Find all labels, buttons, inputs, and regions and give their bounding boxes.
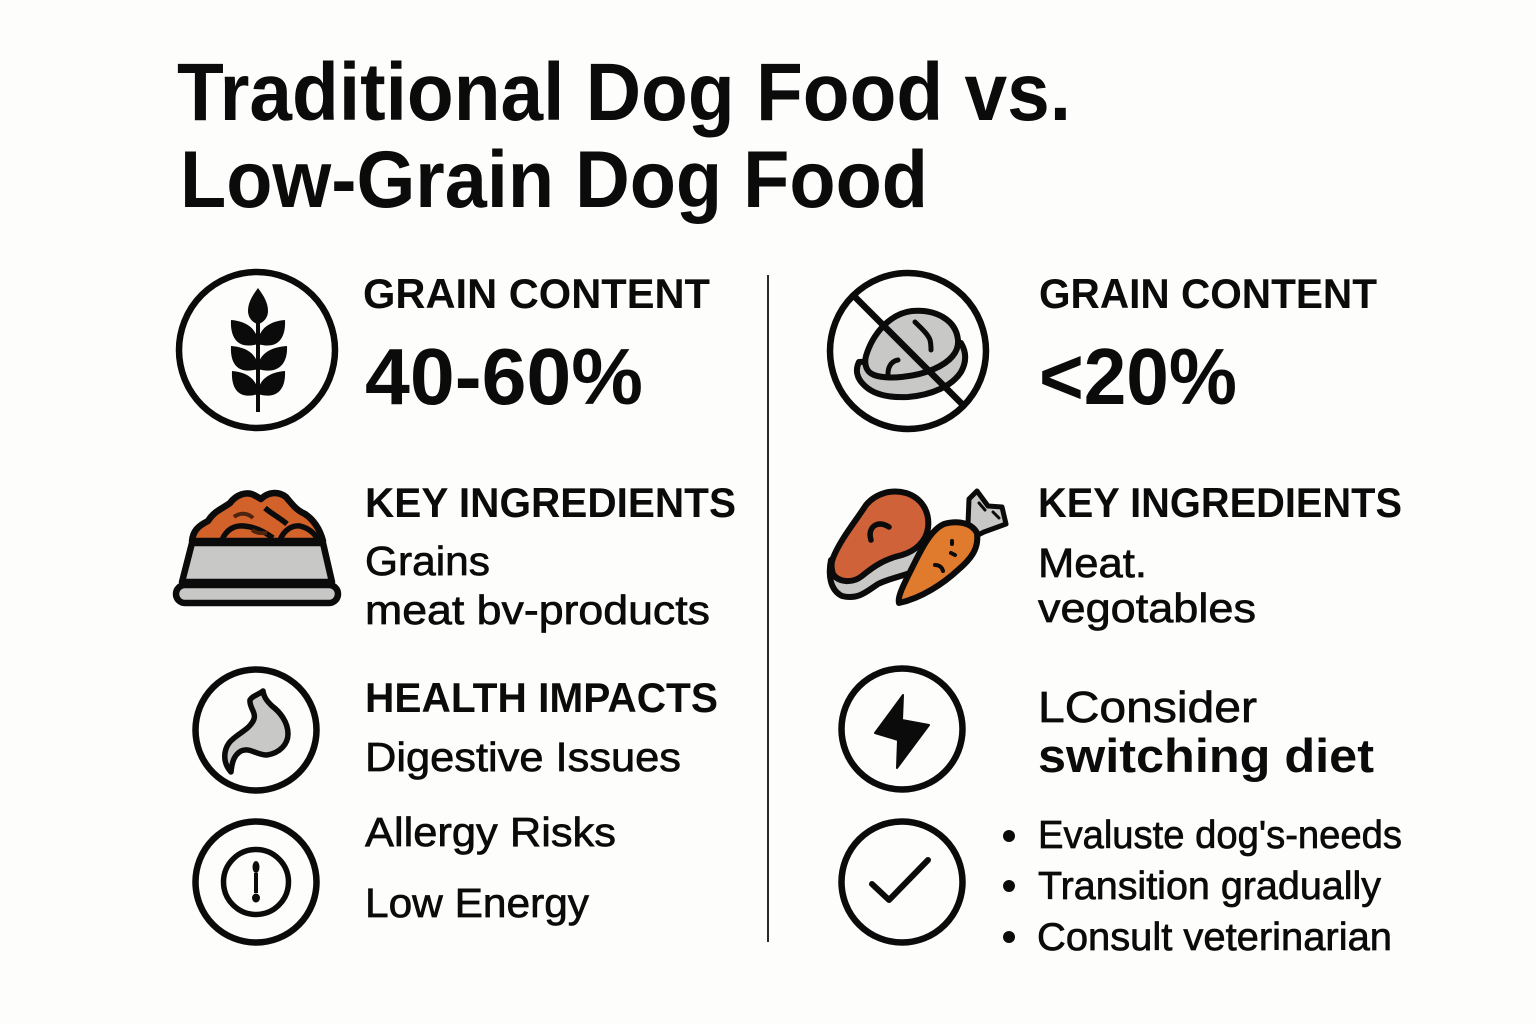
- right checklist: Consult veterinarian: [1037, 916, 1392, 959]
- icon: meat and carrot: [830, 491, 1006, 603]
- right consider switching: [1038, 683, 1374, 782]
- right checklist: [1003, 814, 1402, 959]
- left key ingredients: KEY INGREDIENTS: [365, 479, 736, 526]
- icon: lightning bolt in circle: [842, 668, 962, 790]
- right key ingredients: KEY INGREDIENTS: [1038, 479, 1402, 526]
- icon: grain food bowl: [176, 493, 338, 603]
- icon: crossed-out grain: [830, 273, 986, 429]
- icon: alert in circle: [196, 822, 316, 942]
- right grain content: <20%: [1039, 332, 1237, 421]
- left health impacts: Allergy Risks: [365, 809, 616, 855]
- left key ingredients: meat bv-products: [365, 587, 710, 633]
- right checklist: Transition gradually: [1038, 865, 1382, 908]
- center divider: [767, 275, 769, 942]
- icon: stomach in circle: [196, 670, 316, 790]
- left key ingredients: [365, 479, 736, 633]
- left key ingredients: Grains: [365, 538, 490, 584]
- left grain content: [363, 270, 710, 421]
- right consider switching: LConsider: [1038, 683, 1257, 732]
- left health impacts: [365, 674, 718, 926]
- left grain content: GRAIN CONTENT: [363, 270, 710, 317]
- right key ingredients: Meat.: [1038, 540, 1147, 586]
- right key ingredients: vegotables: [1038, 585, 1256, 631]
- icon: check in circle: [842, 822, 962, 942]
- title: Traditional Dog Food vs.: [177, 47, 1071, 138]
- right grain content: [1039, 270, 1377, 421]
- icon: wheat in circle: [179, 272, 335, 428]
- title: [177, 47, 1071, 225]
- right consider switching: switching diet: [1038, 729, 1374, 782]
- left grain content: 40-60%: [365, 332, 643, 421]
- right grain content: GRAIN CONTENT: [1039, 270, 1377, 317]
- left health impacts: Low Energy: [365, 880, 590, 926]
- title: Low-Grain Dog Food: [180, 135, 928, 225]
- left health impacts: HEALTH IMPACTS: [365, 674, 718, 721]
- left health impacts: Digestive Issues: [365, 734, 681, 780]
- right checklist: Evaluste dog's-needs: [1038, 814, 1402, 857]
- right key ingredients: [1038, 479, 1402, 631]
